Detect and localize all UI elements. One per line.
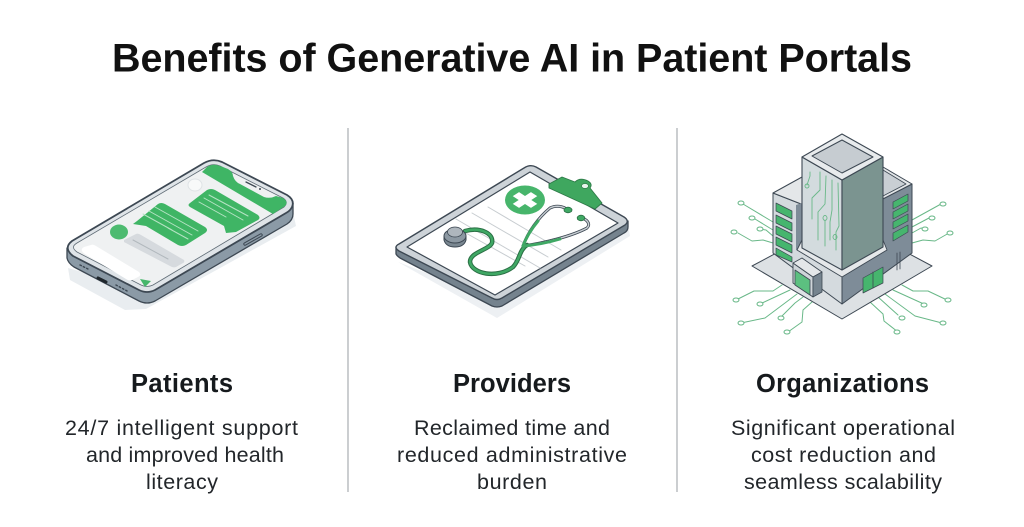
chat bubble	[188, 189, 260, 233]
heading: organizations: Organizations	[756, 370, 929, 398]
panel: organizations	[731, 134, 955, 494]
text: providers benefit: reduced administrative	[397, 443, 627, 467]
green cross badge	[505, 186, 545, 214]
chat bubble	[133, 203, 207, 246]
clip	[549, 177, 602, 209]
text: patients benefit: and improved health	[86, 443, 284, 467]
heading: patients: Patients	[131, 370, 233, 398]
tower collar	[797, 240, 887, 277]
stethoscope tube	[465, 230, 527, 274]
chest piece	[444, 236, 466, 247]
text: providers benefit	[397, 416, 627, 494]
text: patients benefit: 24/7 intelligent support	[65, 416, 298, 440]
lower block	[773, 193, 842, 304]
input field	[82, 245, 140, 280]
text: providers benefit: burden	[477, 470, 547, 494]
title: Benefits of Generative AI in Patient Portals	[112, 36, 912, 80]
text: organizations benefit: seamless scalability	[744, 470, 942, 494]
icon: clipboard with stethoscope	[396, 166, 630, 318]
panel: providers	[396, 166, 630, 494]
tower	[802, 157, 842, 270]
text: patients benefit	[65, 416, 298, 494]
tower circuit pattern	[805, 172, 839, 250]
screen header	[202, 165, 287, 214]
speaker	[246, 182, 256, 187]
base platform	[752, 218, 932, 319]
text: organizations benefit: cost reduction and	[751, 443, 936, 467]
heading: providers: Providers	[453, 370, 571, 398]
gray message	[124, 234, 184, 267]
circuit traces	[731, 201, 953, 334]
icon: smartphone with chat	[67, 160, 296, 310]
entrance	[793, 263, 813, 297]
text: providers benefit: Reclaimed time and	[414, 416, 610, 440]
text: organizations benefit	[731, 416, 955, 494]
text: organizations benefit: Significant operational	[731, 416, 955, 440]
icon: building on circuit board	[731, 134, 953, 334]
windows	[776, 194, 908, 293]
document lines	[456, 207, 561, 268]
text: patients benefit: literacy	[146, 470, 218, 494]
panel: patients	[65, 160, 298, 494]
